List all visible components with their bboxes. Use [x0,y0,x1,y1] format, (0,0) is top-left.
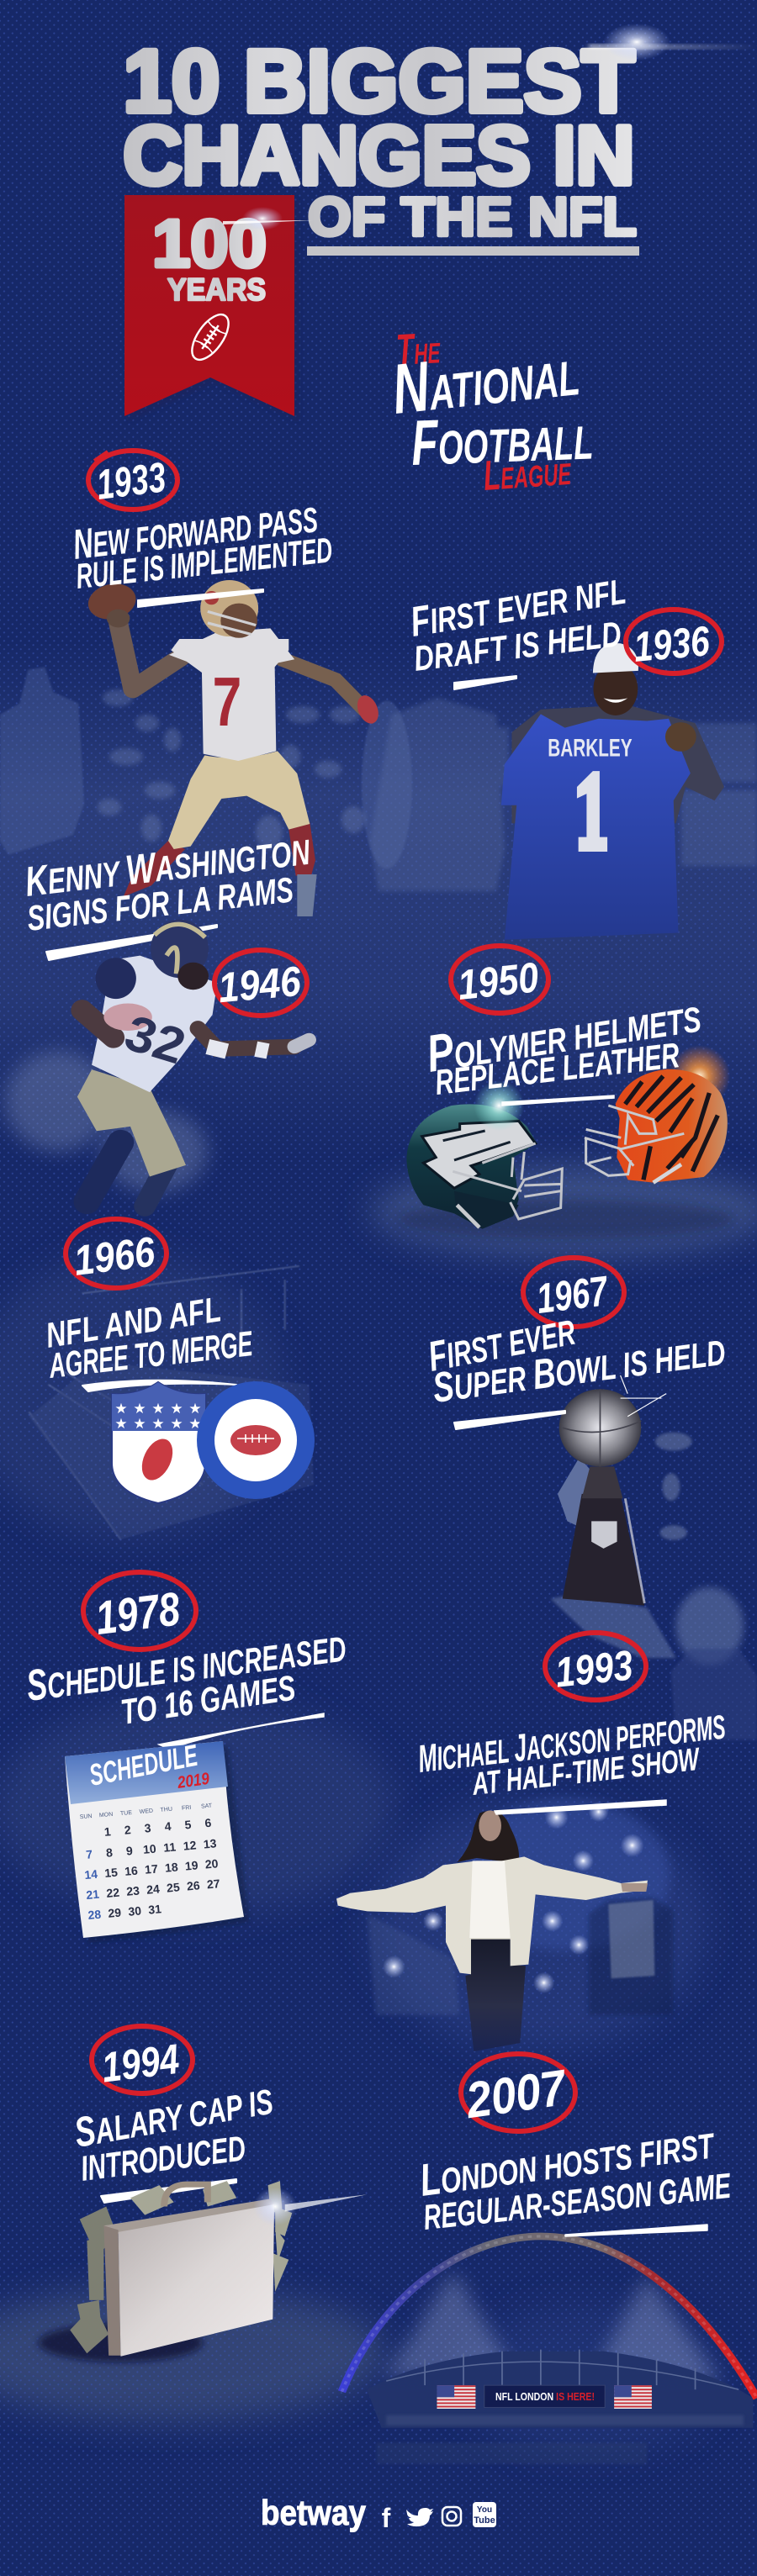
panel: 1936 first draft [407,566,724,940]
panel: 1978 schedule [24,1572,348,1943]
heading: michael jackson performs at half-time show [416,1702,728,1814]
illustration: calendar: 23 [126,1883,140,1898]
illustration: quarterback [84,579,382,726]
icon: nfl shield: ★ [188,1416,202,1433]
year badge: 1993: 1993 [553,1641,635,1697]
illustration: calendar: 2019 [176,1770,211,1792]
icon: nfl shield [112,1382,205,1503]
icon: twitter [406,2508,433,2526]
icon: youtube: Tube [474,2515,495,2526]
illustration: calendar: FRI [182,1805,192,1812]
icon: nfl shield: ★ [114,1416,128,1433]
heading: schedule is increased to 16 games: SCHEDULE IS INCREASED [24,1622,348,1711]
panel: 1933 forward pass [71,451,382,916]
ribbon: 100 years [124,195,299,421]
icon: football [185,309,236,366]
icon: youtube: You [477,2505,492,2515]
logotype: the national football league: THE [395,324,442,375]
logotype: the national football league: LEAGUE [482,446,573,499]
title flares [223,24,757,230]
heading: first ever nfl draft is held: FIRST EVER NFL [407,566,629,646]
icon: instagram [442,2507,461,2526]
heading: nfl and afl agree to merge: AGREE TO MERGE [46,1323,256,1386]
illustration: calendar: 1 [103,1824,112,1839]
heading: kenny washington signs for la rams: SIGNS FOR LA RAMS [25,869,295,938]
icon: nfl shield: ★ [188,1401,202,1417]
heading: salary cap is introduced: INTRODUCED [78,2128,248,2188]
icon: youtube [473,2502,496,2527]
illustration: calendar: SUN [80,1813,93,1820]
illustration: calendar: 10 [142,1842,156,1856]
year badge: 1933: 1933 [94,453,168,509]
heading: first ever super bowl is held [425,1306,728,1429]
year badge: 1978: 1978 [93,1581,183,1644]
heading: nfl and afl agree to merge: NFL AND AFL [43,1289,224,1355]
illustration: wembley stadium and arch [341,2236,757,2464]
illustration: calendar: 30 [128,1903,142,1919]
illustration: calendar: 20 [204,1856,219,1871]
illustration: calendar: MON [99,1812,114,1819]
illustration: calendar: 2 [124,1823,131,1837]
illustration: calendar: THU [160,1807,172,1813]
illustration: calendar: TUE [120,1810,133,1817]
illustration: calendar: 16 [124,1864,139,1878]
illustration: calendar: 25 [166,1880,181,1895]
panel: 1993 michael jackson [336,1633,728,2051]
title: 10 BIGGEST [123,32,634,131]
illustration: quarterback legs and jersey [124,639,317,916]
stadium screen text: NFL LONDON IS HERE! [495,2390,595,2403]
icon: us flag right [614,2385,652,2409]
heading: kenny washington signs for la rams [23,826,313,960]
year badge: 1994: 1994 [99,2035,182,2092]
icon: nfl shield: ★ [133,1416,146,1433]
heading: polymer helmets replace leather [423,985,704,1106]
illustration: calendar: 13 [203,1836,217,1851]
logotype: the national football league [389,324,594,499]
illustration: crowd and performer [336,1799,673,2051]
ribbon: 100 years: 100 [152,206,267,281]
heading: salary cap is introduced [71,2076,276,2203]
panel: 1994 salary cap [39,2026,367,2362]
illustration: calendar: 31 [148,1902,162,1917]
illustration: calendar: 14 [84,1867,98,1882]
illustration: calendar: WED [139,1808,153,1815]
heading: london hosts first regular-season game [417,2117,733,2237]
illustration: briefcase of money [39,2181,367,2362]
illustration: calendar: 7 [85,1847,93,1861]
jersey number 7: 7 [213,662,241,741]
year badge: 1967: 1967 [534,1267,611,1322]
background: stadium [29,1266,314,1539]
illustration: running back [5,920,309,1206]
illustration: calendar: 3 [144,1821,151,1835]
illustration: calendar: 27 [206,1877,220,1891]
heading: first ever nfl draft is held: DRAFT IS HELD [411,614,623,678]
illustration: bengals helmet [398,1045,734,1238]
heading: new forward pass rule is implemented: RULE IS IMPLEMENTED [74,530,334,596]
illustration: calendar: 24 [146,1882,161,1897]
illustration: calendar: SAT [201,1803,213,1810]
illustration: player with jersey: BARKLEY [548,735,633,763]
illustration: calendar: 15 [104,1866,119,1880]
illustration: calendar: 8 [105,1845,114,1860]
heading: new forward pass rule is implemented: NEW FORWARD PASS [71,494,320,568]
year badge: 1950: 1950 [456,953,541,1009]
heading: first ever nfl draft is held [407,566,629,689]
background ghost players and crowd [0,667,757,891]
icon: nfl shield: ★ [133,1401,146,1417]
heading: nfl and afl agree to merge [43,1289,256,1391]
icon: nfl shield: ★ [151,1416,165,1433]
logotype: the national football league: FOOTBALL [410,402,594,479]
illustration: fan and lombardi trophy [550,1375,757,1740]
heading: schedule is increased to 16 games: TO 16 GAMES [119,1668,298,1732]
betway logo: betway [261,2493,367,2532]
illustration: calendar: 28 [87,1908,102,1922]
icon: afl roundel [197,1381,315,1499]
illustration: calendar: 29 [108,1905,122,1920]
illustration: calendar: 21 [86,1887,100,1902]
heading: kenny washington signs for la rams: KENNY WASHINGTON [23,826,313,905]
year badge: 1936: 1936 [632,617,712,671]
illustration: calendar: 26 [186,1878,200,1893]
illustration: calendar: 11 [163,1840,177,1855]
year badge: 2007: 2007 [462,2059,571,2129]
illustration: calendar: 22 [106,1886,120,1900]
illustration: quarterback helmet [169,580,294,664]
illustration: calendar: SCHEDULE [87,1738,201,1792]
icon: nfl shield: ★ [170,1401,183,1417]
illustration: calendar: 9 [125,1844,134,1858]
illustration: calendar: 4 [164,1819,172,1834]
illustration: eagles helmet [406,1080,562,1229]
illustration: player with jersey [501,643,724,940]
ribbon: 100 years: YEARS [167,272,266,307]
panel: 1966 merger [29,1219,315,1539]
icon: nfl shield: ★ [114,1401,128,1417]
footer: betway and social icons [261,2493,496,2533]
year badge: 1966: 1966 [71,1227,158,1285]
panel: 2007 london game [341,2054,757,2464]
title [123,32,639,256]
heading: new forward pass rule is implemented [71,494,334,607]
icon: nfl shield: ★ [151,1401,165,1417]
heading: first ever super bowl is held: FIRST EVER [425,1306,579,1380]
illustration: calendar: 19 [184,1858,199,1873]
title: CHANGES IN [123,109,634,202]
icon: facebook: f [382,2503,391,2533]
icon: nfl shield: ★ [170,1416,183,1433]
panel: 1946 kenny washington [5,826,313,1206]
illustration: running back: 32 [118,1005,193,1075]
heading: schedule is increased to 16 games [24,1622,348,1749]
year badge: 1946: 1946 [216,958,304,1011]
icon: us flag left [437,2385,475,2409]
illustration: calendar: 5 [184,1818,192,1831]
illustration: calendar: 18 [164,1860,178,1875]
panel: 1967 super bowl [425,1258,757,1740]
logotype: the national football league: NATIONAL [389,330,583,429]
panel: 1950 polymer helmets [398,946,734,1238]
illustration: calendar: 12 [183,1838,197,1853]
illustration: calendar: 17 [144,1861,159,1877]
title: OF THE NFL [308,186,637,247]
heading: salary cap is introduced: SALARY CAP IS [71,2076,276,2156]
illustration: calendar [65,1738,249,1943]
illustration: calendar: 6 [204,1816,212,1829]
